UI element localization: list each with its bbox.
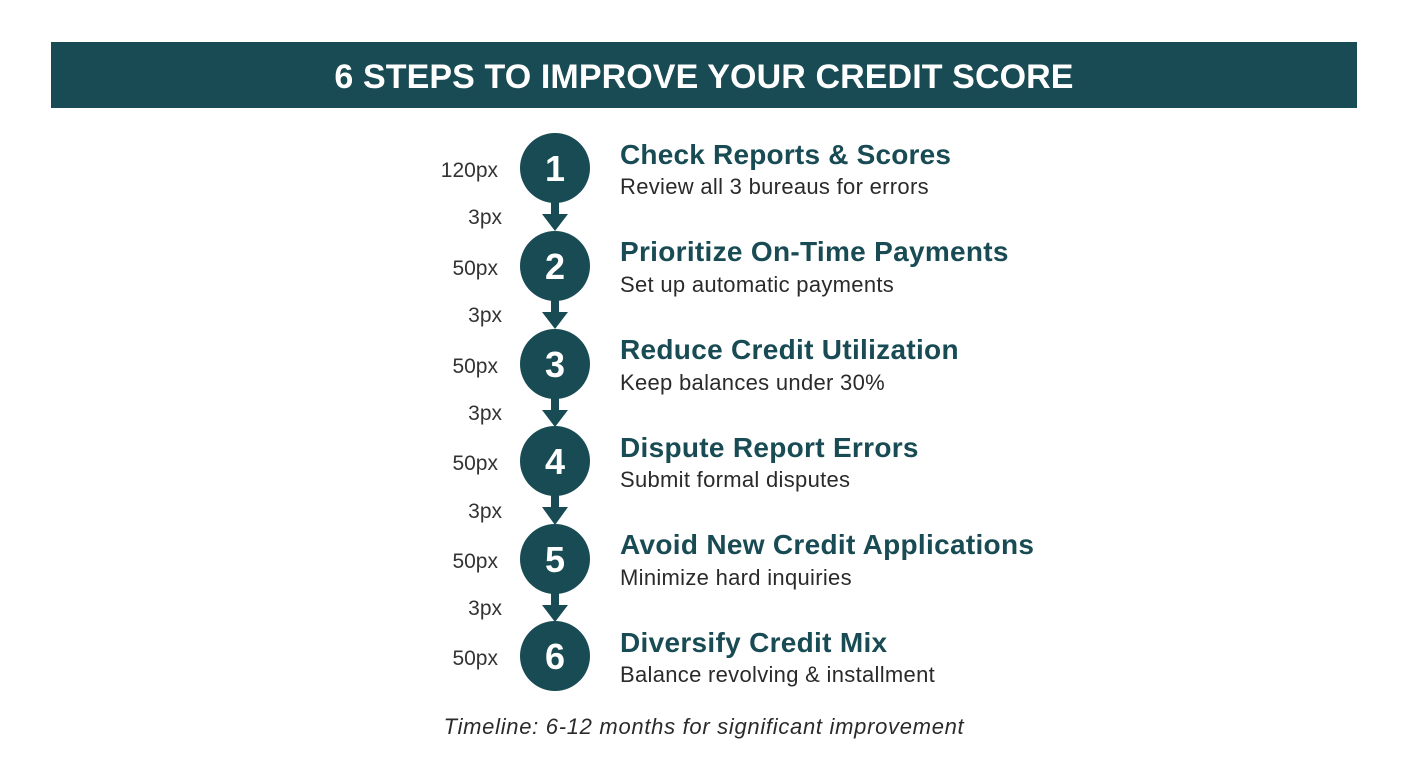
step 1: Review all 3 bureaus for errors [620, 174, 929, 199]
step 6: 6 [545, 636, 565, 677]
arrow 3-4 [468, 398, 568, 427]
step 6: Balance revolving & installment [620, 662, 935, 687]
step 4: 4 [545, 441, 565, 482]
step 3 [452, 329, 959, 399]
step 2: 50px [452, 257, 498, 280]
title banner: 6 STEPS TO IMPROVE YOUR CREDIT SCORE [334, 58, 1074, 96]
step 5: Avoid New Credit Applications [620, 529, 1034, 560]
step 4 [452, 426, 919, 496]
arrow 1-2: 3px [468, 206, 502, 229]
step 3: Keep balances under 30% [620, 370, 885, 395]
arrow 5-6 [468, 593, 568, 622]
step 5: 5 [545, 539, 565, 580]
step 2 [452, 231, 1009, 301]
arrow 3-4: 3px [468, 402, 502, 425]
step 6 [452, 621, 935, 691]
step 2: Set up automatic payments [620, 272, 894, 297]
step 1: Check Reports & Scores [620, 139, 951, 170]
arrow 4-5 [468, 495, 568, 525]
arrow 2-3 [468, 300, 568, 329]
step 5: Minimize hard inquiries [620, 565, 852, 590]
step 3: 3 [545, 344, 565, 385]
step 6: Diversify Credit Mix [620, 627, 888, 658]
step 2: Prioritize On-Time Payments [620, 236, 1009, 267]
step 1: 120px [441, 159, 498, 182]
title banner [51, 42, 1357, 108]
step 4: 50px [452, 452, 498, 475]
arrow 5-6: 3px [468, 597, 502, 620]
step 3: 50px [452, 355, 498, 378]
arrow 2-3: 3px [468, 304, 502, 327]
step 5 [452, 524, 1034, 594]
step 2: 2 [545, 246, 565, 287]
arrow 1-2 [468, 202, 568, 231]
step 5: 50px [452, 550, 498, 573]
step 1: 1 [545, 148, 565, 189]
step 1 [441, 133, 951, 203]
step 4: Dispute Report Errors [620, 432, 919, 463]
step 4: Submit formal disputes [620, 467, 850, 492]
arrow 4-5: 3px [468, 500, 502, 523]
footer note: Timeline: 6-12 months for significant improvement [444, 714, 965, 739]
step 6: 50px [452, 647, 498, 670]
step 3: Reduce Credit Utilization [620, 334, 959, 365]
